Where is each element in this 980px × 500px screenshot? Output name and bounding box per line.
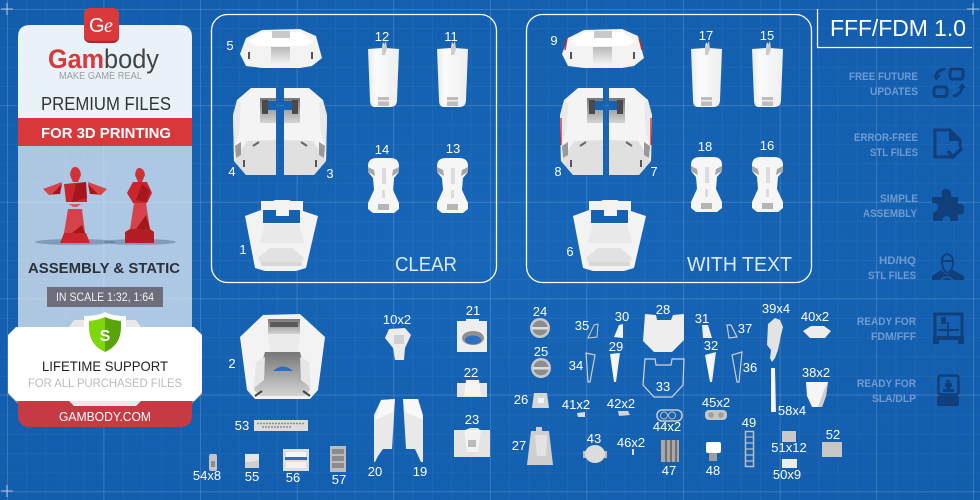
logo badge: G	[89, 15, 105, 37]
part 48	[706, 442, 721, 478]
part 8: 8	[554, 164, 562, 179]
part 21: 21	[466, 303, 480, 318]
part 38x2: 38x2	[802, 365, 830, 380]
part 18	[691, 139, 722, 212]
part 2: 2	[228, 356, 236, 371]
part 49: 49	[742, 415, 756, 430]
part 21	[457, 303, 487, 352]
part 9: 9	[550, 33, 558, 48]
icon: updates	[933, 69, 966, 96]
part 24	[530, 304, 550, 338]
brand name: body	[104, 44, 159, 74]
red banner	[18, 118, 192, 146]
part 53: 53	[235, 418, 249, 433]
feature: hd/hq stl: HD/HQ	[879, 255, 916, 267]
part 42x2: 42x2	[607, 396, 635, 411]
part 35	[575, 318, 598, 338]
part 3: 3	[326, 166, 334, 181]
icon: shield: S	[100, 328, 111, 345]
part 45x2: 45x2	[702, 395, 730, 410]
part 49	[742, 415, 756, 466]
part 11: 11	[444, 29, 458, 44]
part 47	[661, 440, 679, 478]
part 25: 25	[534, 344, 548, 359]
part 50x9	[773, 459, 801, 482]
feature: free future updates: UPDATES	[870, 86, 918, 98]
part 34: 34	[569, 358, 583, 373]
part 16: 16	[760, 138, 774, 153]
part 6: 6	[566, 244, 574, 259]
part 1: 1	[239, 242, 247, 257]
part 17: 17	[699, 28, 713, 43]
part 27	[512, 427, 553, 465]
part 29: 29	[609, 339, 623, 354]
feature: ready for sla	[857, 376, 959, 406]
red footer	[18, 400, 192, 427]
part 43: 43	[587, 431, 601, 446]
part 33	[643, 359, 684, 397]
version tag: FFF/FDM 1.0	[830, 15, 966, 41]
part 37: 37	[738, 321, 752, 336]
part 58x4	[771, 368, 806, 418]
icon: shield	[84, 312, 126, 352]
part 54x8: 54x8	[193, 468, 221, 483]
part 31	[695, 311, 712, 338]
part 30	[614, 309, 629, 338]
part 9	[550, 29, 644, 68]
part 36: 36	[743, 360, 757, 375]
part 12: 12	[375, 29, 389, 44]
part 38x2	[802, 365, 830, 407]
part 12	[368, 29, 399, 107]
panel: lifetime support	[8, 312, 202, 406]
part 25	[531, 344, 551, 378]
part 4: 4	[228, 164, 236, 179]
part 18: 18	[698, 139, 712, 154]
part 33: 33	[656, 379, 670, 394]
feature: free future updates: FREE FUTURE	[849, 71, 918, 83]
part 3	[284, 88, 334, 181]
part 13: 13	[446, 141, 460, 156]
feature: ready for fdm: READY FOR	[857, 316, 916, 328]
feature: error-free stl	[854, 130, 962, 159]
figure: static model	[104, 168, 176, 245]
part 40x2: 40x2	[801, 309, 829, 324]
part 17	[691, 28, 722, 107]
support heading: LIFETIME SUPPORT	[42, 358, 168, 374]
part 39x4	[762, 301, 790, 362]
feature: simple assembly	[863, 189, 964, 221]
part 48: 48	[706, 463, 720, 478]
part 29	[609, 339, 623, 382]
part 11	[437, 29, 468, 107]
part 26: 26	[514, 392, 528, 407]
logo badge	[84, 8, 119, 43]
feature: ready for sla: READY FOR	[857, 378, 916, 390]
part 51x12: 51x12	[771, 440, 807, 455]
light figure section	[18, 146, 192, 331]
part 56: 56	[286, 470, 300, 485]
part 5	[226, 29, 322, 68]
feature: hd/hq stl: STL FILES	[868, 270, 916, 282]
panel: left promo card	[8, 8, 202, 427]
part 19	[403, 399, 427, 479]
part 24: 24	[533, 304, 547, 319]
part 20: 20	[368, 464, 382, 479]
feature: hd/hq stl	[868, 254, 964, 282]
tagline: MAKE GAME REAL	[59, 70, 142, 82]
part 8	[554, 88, 603, 179]
icon: puzzle piece	[932, 189, 964, 221]
part 37	[727, 321, 752, 338]
part 56	[283, 449, 309, 485]
part 51x12	[771, 431, 807, 455]
part 39x4: 39x4	[762, 301, 790, 316]
part 36	[732, 352, 757, 382]
part 30: 30	[615, 309, 629, 324]
feature: simple assembly: SIMPLE	[880, 193, 918, 205]
part 31: 31	[695, 311, 709, 326]
feature: ready for sla: SLA/DLP	[872, 393, 916, 405]
brand name	[48, 44, 159, 74]
part 43	[583, 431, 607, 463]
part 27: 27	[512, 438, 526, 453]
part 46x2: 46x2	[617, 435, 645, 450]
icon: document check	[935, 130, 962, 157]
part 44x2	[653, 410, 682, 434]
part 28	[643, 302, 684, 352]
part 15: 15	[760, 28, 774, 43]
part 19: 19	[413, 464, 427, 479]
part 52	[822, 427, 842, 457]
part 13	[437, 141, 468, 213]
part 35: 35	[575, 318, 589, 333]
feature: ready for fdm	[857, 314, 964, 344]
feature: error-free stl: STL FILES	[870, 147, 918, 159]
icon: fdm printer	[933, 314, 964, 344]
feature: simple assembly: ASSEMBLY	[863, 208, 918, 220]
part 5: 5	[226, 38, 234, 53]
part 41x2: 41x2	[562, 397, 590, 412]
heading: with text: WITH TEXT	[687, 254, 792, 276]
figure: assembly model	[35, 167, 115, 245]
part 57	[330, 446, 346, 487]
part 53	[235, 418, 308, 433]
heading: clear: CLEAR	[395, 254, 457, 276]
heading: premium files: PREMIUM FILES	[41, 94, 171, 114]
part 7: 7	[650, 164, 658, 179]
support subheading: FOR ALL PURCHASED FILES	[28, 376, 182, 390]
part 16	[752, 138, 783, 212]
feature: ready for fdm: FDM/FFF	[871, 331, 916, 343]
part 6	[566, 200, 646, 271]
card top section	[18, 25, 192, 118]
part 15	[752, 28, 783, 107]
part 45x2	[702, 395, 730, 420]
part 10x2	[383, 312, 411, 360]
part 47: 47	[662, 463, 676, 478]
part 32	[704, 338, 718, 382]
part 40x2	[801, 309, 831, 338]
version tag	[818, 9, 972, 48]
part 55: 55	[245, 469, 259, 484]
red footer: GAMBODY.COM	[59, 409, 151, 424]
part 34	[569, 353, 595, 382]
feature: free future updates	[849, 69, 966, 98]
brand name: Gam	[48, 44, 104, 74]
part 58x4: 58x4	[778, 403, 806, 418]
part 23	[454, 412, 490, 457]
scale tag	[47, 287, 163, 307]
scale tag: IN SCALE 1:32, 1:64	[56, 292, 155, 304]
part 22	[457, 365, 487, 397]
part 4	[228, 88, 276, 179]
part 7	[609, 88, 658, 179]
part 44x2: 44x2	[653, 419, 681, 434]
feature: error-free stl: ERROR-FREE	[854, 132, 918, 144]
red banner: FOR 3D PRINTING	[41, 125, 171, 142]
part 54x8	[193, 454, 221, 483]
part 28: 28	[656, 302, 670, 317]
logo badge: e	[104, 15, 113, 37]
part 55	[245, 454, 259, 484]
panel: clear parts	[212, 14, 496, 282]
part 26	[514, 392, 549, 408]
part 10x2: 10x2	[383, 312, 411, 327]
part 32: 32	[704, 338, 718, 353]
part 57: 57	[332, 472, 346, 487]
part 50x9: 50x9	[773, 467, 801, 482]
part 20	[368, 399, 395, 479]
part 14: 14	[375, 142, 389, 157]
icon: head bust	[932, 254, 964, 280]
heading: assembly and static: ASSEMBLY & STATIC	[28, 261, 181, 277]
part 14	[368, 142, 399, 213]
part 1	[239, 200, 318, 271]
part 23: 23	[465, 412, 479, 427]
part 22: 22	[464, 365, 478, 380]
panel: parts with text	[526, 14, 812, 282]
part 2	[228, 314, 325, 399]
icon: sla printer	[937, 376, 959, 406]
part 52: 52	[826, 427, 840, 442]
